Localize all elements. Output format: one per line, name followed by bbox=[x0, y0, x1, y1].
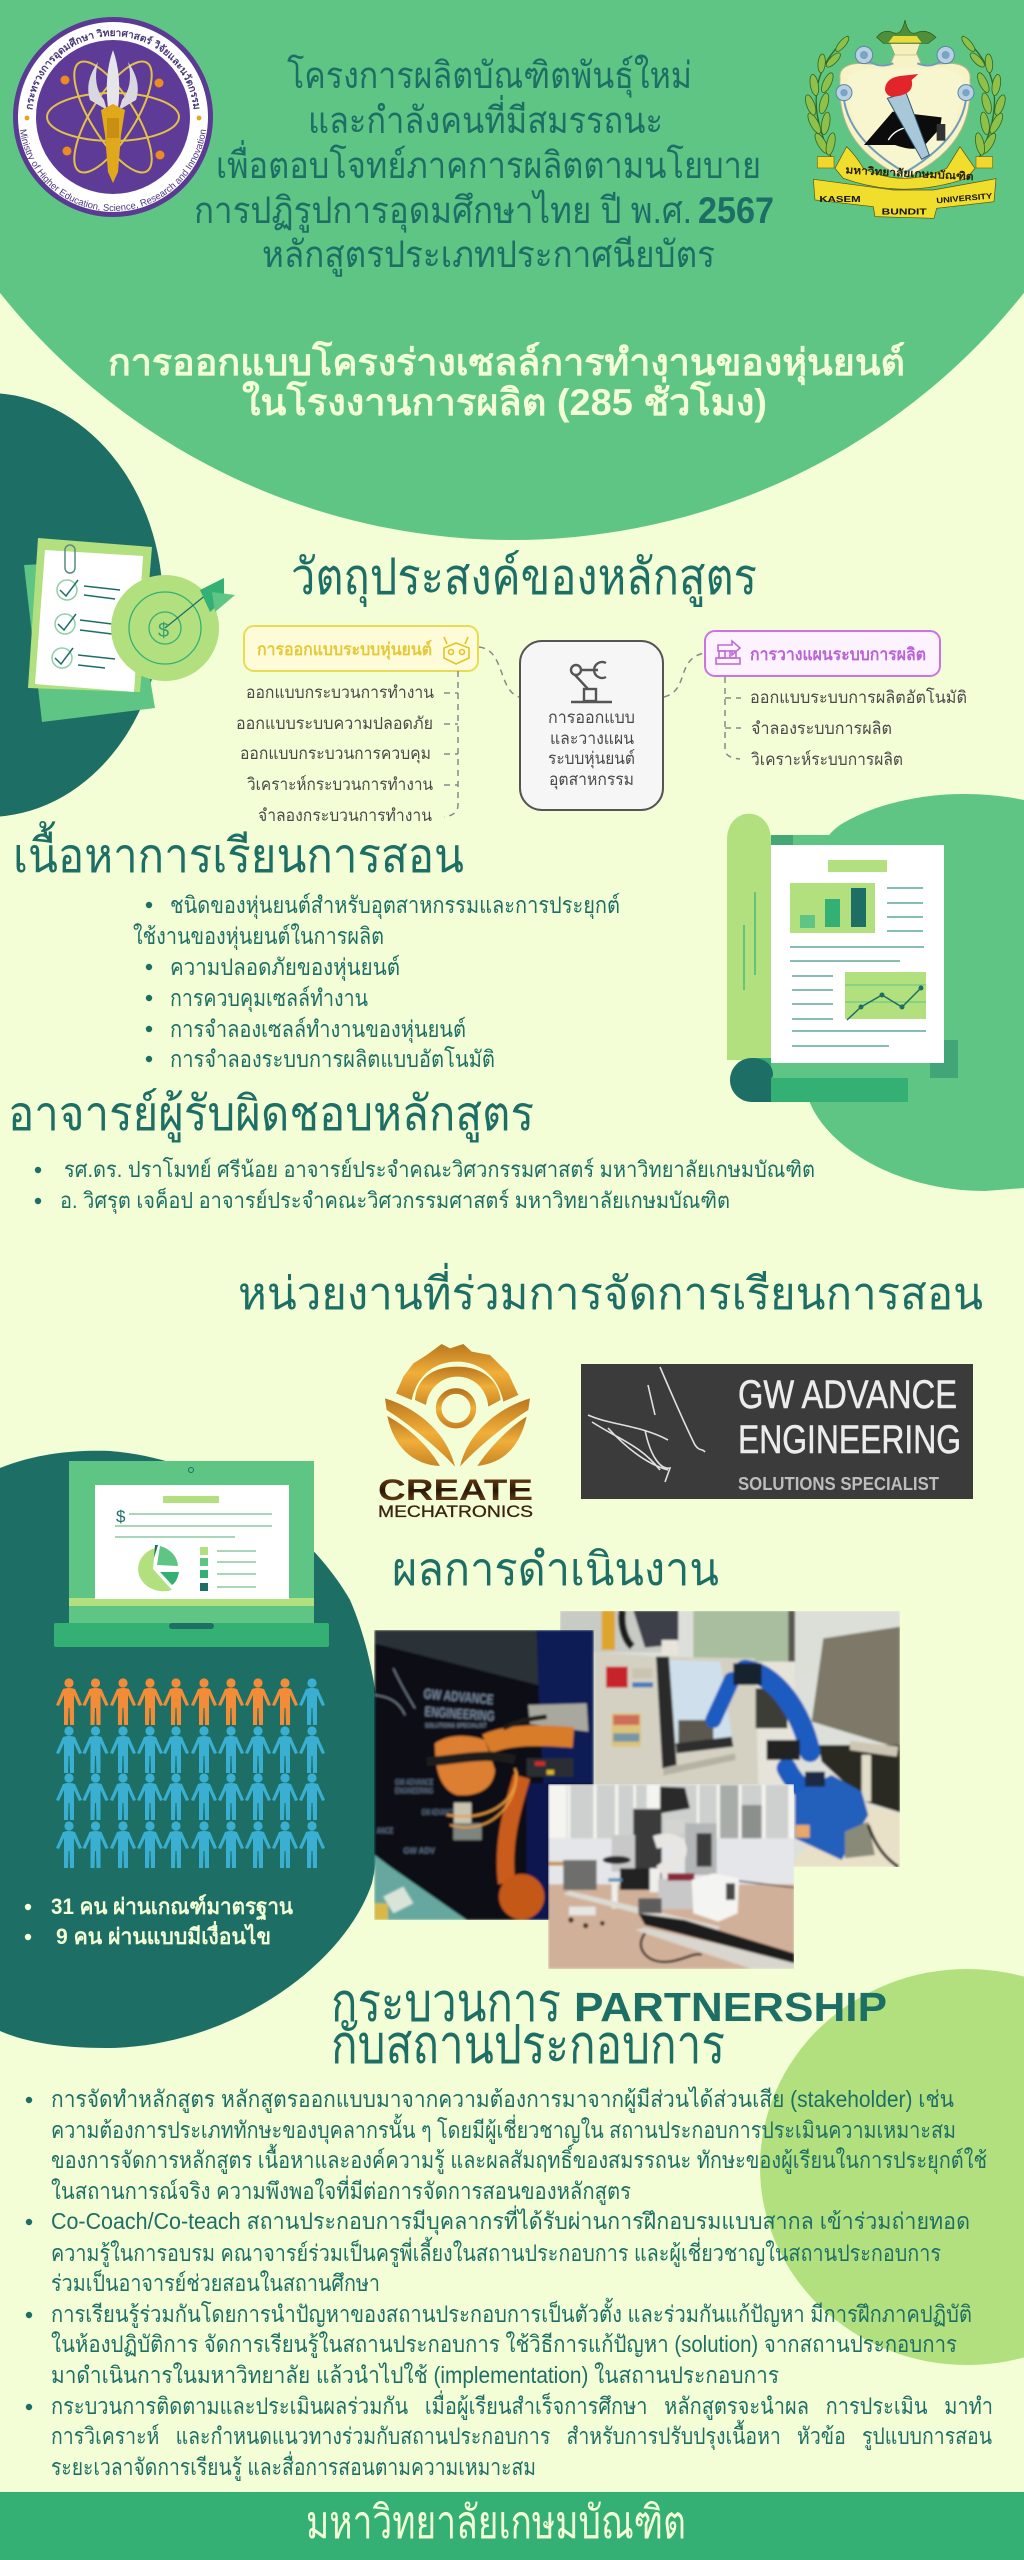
list: robot system design items: ออกแบบระบบความปลอดภัย bbox=[236, 714, 433, 733]
logo: GW Advance Engineering: GW ADVANCE bbox=[738, 1373, 957, 1417]
logo: Kasem Bundit University: UNIVERSITY bbox=[936, 191, 993, 205]
list: course content: การจำลองระบบการผลิตแบบอัตโนมัติ bbox=[170, 1046, 495, 1072]
illustration: laptop with report bbox=[54, 1461, 329, 1647]
heading: partnership process: PARTNERSHIP bbox=[574, 1984, 887, 2030]
text block: partnership details: Co-Coach/Co-teach สถานประกอบการมีบุคลากรที่ได้รับผ่านการฝึกอบรมแบบสากล เข้าร่วมถ่ายทอด bbox=[51, 2205, 970, 2235]
header text: project title: การปฏิรูปการอุดมศึกษาไทย ปี พ.ศ. bbox=[194, 189, 692, 233]
text block: partnership details: ร่วมเป็นอาจารย์ช่วยสอนในสถานศึกษา bbox=[51, 2268, 380, 2296]
header text: project title: และกำลังคนที่มีสมรรถนะ bbox=[308, 94, 663, 141]
illustration: laptop with report: $ bbox=[116, 1507, 126, 1526]
list: lecturers: รศ.ดร. ปราโมทย์ ศรีน้อย อาจารย์ประจำคณะวิศวกรรมศาสตร์ มหาวิทยาลัยเกษมบัณฑิต bbox=[64, 1157, 815, 1182]
list: production planning items: วิเคราะห์ระบบการผลิต bbox=[751, 750, 903, 769]
illustration: checklist and target: $ bbox=[158, 620, 169, 642]
pictogram: people 40 total bbox=[56, 1678, 325, 1868]
panel: centre box: การออกแบบ bbox=[548, 708, 635, 727]
list: course content: ความปลอดภัยของหุ่นยนต์ bbox=[170, 954, 400, 981]
photo: robot cell on linear track bbox=[548, 1784, 794, 1969]
dark blob: upper left bbox=[0, 393, 163, 817]
logo: Kasem Bundit University: BUNDIT bbox=[882, 206, 928, 216]
dark blob: lower left bbox=[0, 1451, 382, 2048]
course title bbox=[108, 340, 905, 423]
logo: Kasem Bundit University: มหาวิทยาลัยเกษมบัณฑิต bbox=[845, 164, 974, 183]
list: production planning items bbox=[750, 687, 967, 769]
photo: yaskawa robot workshop bbox=[560, 1611, 900, 1867]
heading: partnership process: กระบวนการ bbox=[331, 1973, 561, 2033]
panel: centre box: และวางแผน bbox=[550, 729, 634, 748]
heading: results: ผลการดำเนินงาน bbox=[392, 1543, 719, 1595]
list: robot system design items: ออกแบบกระบวนการควบคุม bbox=[240, 744, 431, 764]
logo: Create Mechatronics bbox=[378, 1344, 533, 1521]
photo: KUKA robot on dark stand: GW ADV bbox=[403, 1845, 435, 1855]
list: robot system design items bbox=[236, 683, 434, 825]
results text bbox=[25, 1894, 293, 1949]
header text: project title: โครงการผลิตบัณฑิตพันธุ์ใหม่ bbox=[287, 54, 692, 98]
list: course content: ใช้งานของหุ่นยนต์ในการผลิต bbox=[133, 923, 384, 950]
top green header shape bbox=[0, 0, 1024, 540]
heading: responsible lecturers: อาจารย์ผู้รับผิดชอบหลักสูตร bbox=[8, 1088, 534, 1143]
list: lecturers bbox=[35, 1157, 815, 1214]
green blob: right bbox=[793, 794, 1024, 1191]
text block: partnership details: ระยะเวลาจัดการเรียนรู้ และสื่อการสอนตามความเหมาะสม bbox=[51, 2451, 536, 2481]
photo: KUKA robot on dark stand: ANCE bbox=[377, 1825, 393, 1835]
list: course content: ชนิดของหุ่นยนต์สำหรับอุตสาหกรรมและการประยุกต์ bbox=[170, 892, 620, 919]
logo: Kasem Bundit University bbox=[803, 20, 1007, 218]
panel: robot system design box bbox=[244, 626, 478, 671]
footer bar bbox=[0, 2492, 1024, 2560]
heading: partnership process bbox=[331, 1973, 887, 2075]
heading: partner organisations: หน่วยงานที่ร่วมการจัดการเรียนการสอน bbox=[238, 1262, 983, 1319]
logo: Create Mechatronics: CREATE bbox=[378, 1474, 533, 1507]
heading: course content: เนื้อหาการเรียนการสอน bbox=[13, 821, 464, 883]
header text: project title: เพื่อตอบโจทย์ภาคการผลิตตามนโยบาย bbox=[216, 139, 761, 186]
list: course content: การจำลองเซลล์ทำงานของหุ่นยนต์ bbox=[170, 1016, 466, 1043]
text block: partnership details: มาดำเนินการในมหาวิทยาลัย แล้วนำไปใช้ (implementation) ในสถานประกอบการ bbox=[51, 2362, 779, 2388]
footer bar: มหาวิทยาลัยเกษมบัณฑิต bbox=[306, 2496, 686, 2548]
photo: KUKA robot on dark stand: GW ADVANCE bbox=[423, 1685, 494, 1707]
logo: Ministry of Higher Education: Ministry of Higher Education, Science, Research and Innovation bbox=[20, 129, 206, 212]
list: production planning items: จำลองระบบการผลิต bbox=[751, 719, 892, 738]
logo: GW Advance Engineering bbox=[581, 1364, 973, 1499]
heading: course objectives: วัตถุประสงค์ของหลักสูตร bbox=[291, 549, 757, 607]
photo: KUKA robot on dark stand: GW ADVANCE bbox=[422, 1807, 455, 1817]
photo: KUKA robot on dark stand bbox=[375, 1630, 593, 1920]
list: production planning items: ออกแบบระบบการผลิตอัตโนมัติ bbox=[750, 687, 967, 707]
connector: left list bbox=[444, 671, 458, 817]
course title: การออกแบบโครงร่างเซลล์การทำงานของหุ่นยนต์ bbox=[108, 340, 905, 386]
logo: GW Advance Engineering: ENGINEERING bbox=[738, 1418, 961, 1462]
illustration: checklist and target bbox=[24, 538, 235, 722]
header text: project title: หลักสูตรประเภทประกาศนียบัตร bbox=[262, 234, 715, 277]
list: robot system design items: วิเคราะห์กระบวนการทำงาน bbox=[247, 775, 433, 794]
header text: project title bbox=[194, 54, 774, 277]
logo: Ministry of Higher Education: กระทรวงการอุดมศึกษา วิทยาศาสตร์ วิจัยและนวัตกรรม bbox=[26, 29, 200, 110]
results text: 31 คน ผ่านเกณฑ์มาตรฐาน bbox=[51, 1894, 293, 1921]
connector: right list bbox=[725, 677, 741, 759]
list: robot system design items: จำลองกระบวนการทำงาน bbox=[258, 806, 432, 825]
list: lecturers: อ. วิศรุต เจค็อป อาจารย์ประจำคณะวิศวกรรมศาสตร์ มหาวิทยาลัยเกษมบัณฑิต bbox=[60, 1186, 730, 1214]
connector: to centre from left bbox=[479, 647, 519, 697]
text block: partnership details bbox=[26, 2086, 993, 2481]
text block: partnership details: การจัดทำหลักสูตร หลักสูตรออกแบบมาจากความต้องการมาจากผู้มีส่วนได้ส่วนเสีย (stakeholder) เช่น bbox=[51, 2086, 954, 2113]
photo: KUKA robot on dark stand: ENGINEERING bbox=[395, 1785, 433, 1795]
text block: partnership details: ในสถานการณ์จริง ความพึงพอใจที่มีต่อการจัดการสอนของหลักสูตร bbox=[51, 2175, 631, 2205]
panel: production planning box bbox=[705, 631, 940, 676]
light green blob: lower right bbox=[760, 1969, 1024, 2365]
connector: centre to right bbox=[664, 653, 704, 697]
logo: GW Advance Engineering: SOLUTIONS SPECIALIST bbox=[738, 1474, 939, 1494]
results text: 9 คน ผ่านแบบมีเงื่อนไข bbox=[56, 1920, 271, 1949]
illustration: report scroll bbox=[727, 814, 958, 1102]
logo: Kasem Bundit University: KASEM bbox=[819, 194, 861, 204]
logo: Create Mechatronics: MECHATRONICS bbox=[378, 1502, 533, 1521]
photo: KUKA robot on dark stand: SOLUTIONS SPECIALIST bbox=[425, 1723, 487, 1729]
course title: ในโรงงานการผลิต (285 ชั่วโมง) bbox=[242, 376, 767, 423]
panel: production planning box: การวางแผนระบบการผลิต bbox=[750, 645, 926, 664]
header text: project title: 2567 bbox=[698, 190, 774, 231]
photo: KUKA robot on dark stand: ENGINEERING bbox=[424, 1703, 495, 1724]
panel: centre box: อุตสาหกรรม bbox=[549, 770, 634, 790]
panel: centre box bbox=[520, 641, 663, 810]
list: course content: การควบคุมเซลล์ทำงาน bbox=[170, 985, 368, 1012]
list: robot system design items: ออกแบบกระบวนการทำงาน bbox=[246, 683, 434, 702]
panel: robot system design box: การออกแบบระบบหุ่นยนต์ bbox=[257, 639, 432, 660]
logo: Ministry of Higher Education bbox=[13, 17, 213, 217]
heading: partnership process: กับสถานประกอบการ bbox=[331, 2015, 725, 2075]
panel: centre box: ระบบหุ่นยนต์ bbox=[548, 749, 635, 769]
photo: KUKA robot on dark stand: GW ADVANCE bbox=[395, 1777, 433, 1787]
list: course content bbox=[133, 892, 620, 1072]
